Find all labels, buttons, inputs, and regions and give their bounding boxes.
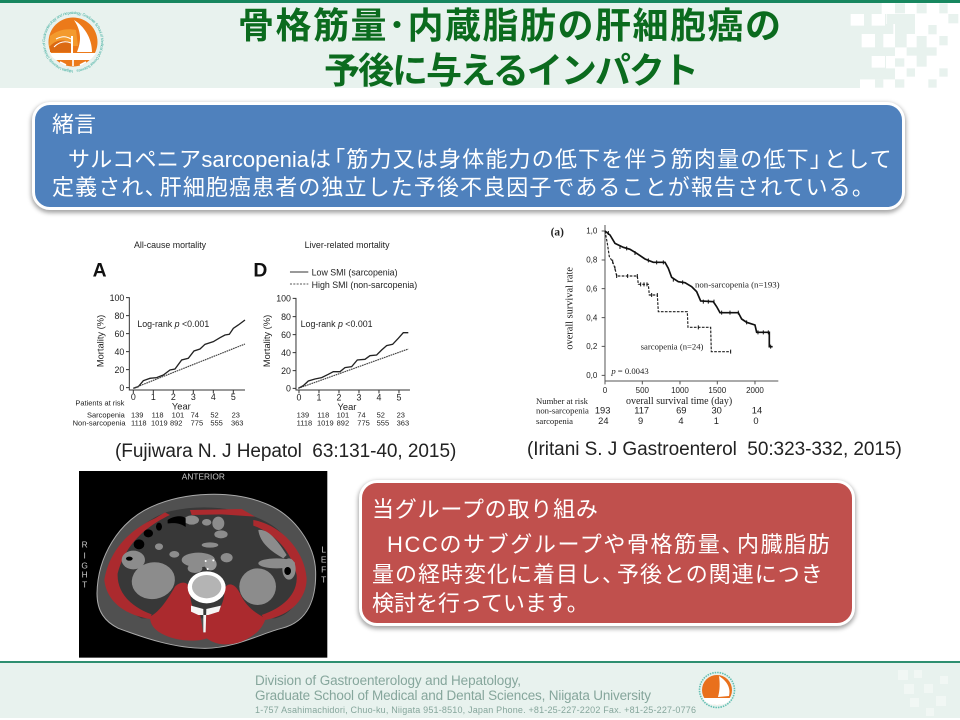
chart: mortality curves A and D: 0 xyxy=(131,392,136,402)
chart: mortality curves A and D: 5 xyxy=(397,393,402,403)
footer: institution text: Division of Gastroenterology and Hepatology, xyxy=(255,673,521,688)
chart: mortality curves A and D: 2 xyxy=(171,392,176,402)
image: abdominal CT with muscle highlighted: L xyxy=(321,544,326,554)
chart: mortality curves A and D: 3 xyxy=(357,393,362,403)
panel: our group's efforts: 量の経時変化に着目し、予後との関連につき xyxy=(372,562,824,587)
image: abdominal CT with muscle highlighted: R xyxy=(82,539,88,549)
chart: mortality curves A and D: 74 xyxy=(191,410,199,419)
chart: overall survival curve: 0,0 xyxy=(586,371,598,380)
chart: mortality curves A and D: 101 xyxy=(337,410,349,419)
chart: mortality curves A and D: 52 xyxy=(377,410,385,419)
chart: mortality curves A and D: 892 xyxy=(170,419,182,428)
chart: mortality curves A and D: 80 xyxy=(114,311,124,321)
panel: introduction: サルコペニアsarcopeniaは「筋力又は身体能力の低下を伴う筋肉量の低下」として xyxy=(68,147,893,172)
chart: mortality curves A and D: D xyxy=(253,260,267,281)
chart: mortality curves A and D: Non-sarcopenia xyxy=(73,419,126,428)
chart: mortality curves A and D: 101 xyxy=(172,410,184,419)
image: abdominal CT with muscle highlighted: H xyxy=(82,570,88,580)
chart: mortality curves A and D: 2 xyxy=(337,393,342,403)
title xyxy=(238,5,783,91)
chart: mortality curves A and D: 80 xyxy=(281,312,291,322)
chart: overall survival curve: p = 0.0043 xyxy=(610,366,649,376)
chart: mortality curves A and D: 0 xyxy=(119,383,124,393)
chart: mortality curves A and D: Log-rank p <0.001 xyxy=(301,319,373,329)
chart: overall survival curve: 9 xyxy=(638,416,643,426)
chart: mortality curves A and D: 40 xyxy=(114,347,124,357)
chart: overall survival curve: 1000 xyxy=(671,386,689,395)
chart: overall survival curve: 2000 xyxy=(746,386,764,395)
chart: overall survival curve: 69 xyxy=(676,406,687,416)
footer: institution text: Graduate School of Medical and Dental Sciences, Niigata University xyxy=(255,688,651,703)
citation: Fujiwara: (Fujiwara N. J Hepatol 63:131-40, 2015) xyxy=(115,441,456,462)
chart: overall survival curve: 30 xyxy=(711,406,722,416)
chart: overall survival curve: 4 xyxy=(678,416,684,426)
chart: overall survival curve: 0,2 xyxy=(586,342,598,351)
chart: mortality curves A and D: High SMI (non-sarcopenia) xyxy=(312,280,417,290)
panel: our group's efforts: HCCのサブグループや骨格筋量、内臓脂肪 xyxy=(387,532,831,557)
chart: mortality curves A and D: 555 xyxy=(377,419,389,428)
chart: overall survival curve: non-sarcopenia (n=193) xyxy=(695,279,780,289)
chart: mortality curves A and D: 892 xyxy=(337,419,349,428)
chart: overall survival curve: 0,6 xyxy=(586,284,598,293)
chart: mortality curves A and D: 363 xyxy=(231,419,243,428)
chart: mortality curves A and D: Patients at risk xyxy=(75,398,125,407)
chart: mortality curves A and D: Low SMI (sarcopenia) xyxy=(312,268,398,278)
chart: overall survival curve: sarcopenia xyxy=(536,416,573,426)
chart: mortality curves A and D: 100 xyxy=(276,294,291,304)
chart: mortality curves A and D: 4 xyxy=(377,393,382,403)
panel: our group's efforts: 当グループの取り組み xyxy=(372,497,599,522)
header band xyxy=(0,0,960,88)
chart: mortality curves A and D: 52 xyxy=(210,410,219,419)
image: abdominal CT with muscle highlighted: T xyxy=(321,574,326,584)
chart: mortality curves A and D: 118 xyxy=(152,410,164,419)
chart: overall survival curve: 0 xyxy=(753,416,759,426)
chart: mortality curves A and D: Sarcopenia xyxy=(87,410,126,419)
chart: mortality curves A and D: Liver-related mortality xyxy=(305,240,390,250)
panel: our group's efforts: 検討を行っています。 xyxy=(372,591,589,616)
chart: mortality curves A and D: 1118 xyxy=(297,419,312,428)
chart: mortality curves A and D: 100 xyxy=(110,293,124,303)
title: 予後に与えるインパクト xyxy=(324,50,697,91)
chart: overall survival curve: overall survival time (day) xyxy=(626,396,732,407)
chart: mortality curves A and D: 60 xyxy=(114,329,124,339)
chart: mortality curves A and D: 0 xyxy=(286,384,291,394)
image: abdominal CT with muscle highlighted: I xyxy=(84,550,86,560)
chart: overall survival curve: non-sarcopenia xyxy=(536,406,589,416)
image: abdominal CT with muscle highlighted: ANTERIOR xyxy=(182,471,225,481)
chart: overall survival curve: (a) xyxy=(551,227,564,239)
chart: mortality curves A and D: 775 xyxy=(191,419,203,428)
chart: overall survival curve: 0,4 xyxy=(586,313,598,322)
chart: mortality curves A and D: 74 xyxy=(357,410,366,419)
chart: mortality curves A and D: 23 xyxy=(397,410,405,419)
chart: mortality curves A and D: Year xyxy=(338,402,356,412)
chart: mortality curves A and D: 775 xyxy=(357,419,370,428)
chart: overall survival curve: 117 xyxy=(634,406,649,416)
chart: mortality curves A and D: A xyxy=(93,260,107,281)
chart: overall survival curve: 0 xyxy=(603,386,608,395)
chart: mortality curves A and D: 0 xyxy=(297,393,302,403)
chart: mortality curves A and D: 3 xyxy=(191,392,196,402)
chart: mortality curves A and D: Mortality (%) xyxy=(96,315,106,367)
panel: our group's efforts xyxy=(359,480,855,626)
chart: overall survival curve: 0,8 xyxy=(586,256,598,265)
chart: mortality curves A and D: 20 xyxy=(281,366,291,376)
logo: university emblem in header: Niigata University Division of Gastroenterology and Hepatology, Graduate School of Medical and Dental Sciences xyxy=(42,11,104,73)
chart: mortality curves A and D: 1019 xyxy=(151,419,168,428)
chart: overall survival curve: 14 xyxy=(752,406,762,416)
image: abdominal CT with muscle highlighted: E xyxy=(321,554,327,564)
panel: introduction: 定義され、肝細胞癌患者の独立した予後不良因子であることが報告されている。 xyxy=(52,175,875,200)
chart: overall survival curve: 1,0 xyxy=(586,227,598,236)
chart: overall survival curve: Number at risk xyxy=(536,396,589,406)
chart: overall survival curve: sarcopenia (n=24) xyxy=(641,342,704,352)
title: 骨格筋量･内蔵脂肪の肝細胞癌の xyxy=(238,5,783,46)
chart: mortality curves A and D: 1118 xyxy=(131,419,147,428)
chart: overall survival curve: 1 xyxy=(714,416,719,426)
chart: mortality curves A and D: Log-rank p <0.001 xyxy=(137,319,209,329)
chart: mortality curves A and D: 60 xyxy=(281,330,291,340)
chart: mortality curves A and D: 23 xyxy=(232,410,240,419)
chart: overall survival curve: 1500 xyxy=(708,386,727,395)
chart: overall survival curve: 193 xyxy=(595,406,610,416)
chart: mortality curves A and D: 139 xyxy=(297,410,309,419)
chart: overall survival curve: 500 xyxy=(636,386,650,395)
chart: mortality curves A and D: 1 xyxy=(151,392,156,402)
panel: introduction: 緒言 xyxy=(52,112,96,137)
image: abdominal CT with muscle highlighted: G xyxy=(81,560,88,570)
image: abdominal CT with muscle highlighted: T xyxy=(82,580,87,590)
citation: Iritani: (Iritani S. J Gastroenterol 50:323-332, 2015) xyxy=(527,439,902,460)
chart: overall survival curve: overall survival rate xyxy=(565,267,576,350)
chart: mortality curves A and D: 1 xyxy=(317,393,322,403)
chart: mortality curves A and D: 555 xyxy=(210,419,223,428)
chart: mortality curves A and D: 118 xyxy=(317,410,329,419)
chart: mortality curves A and D: 139 xyxy=(131,410,143,419)
chart: mortality curves A and D: 20 xyxy=(114,365,124,375)
panel: introduction xyxy=(32,102,905,210)
chart: mortality curves A and D: 40 xyxy=(281,348,291,358)
chart: mortality curves A and D: 4 xyxy=(211,392,216,402)
image: abdominal CT with muscle highlighted: F xyxy=(321,564,326,574)
chart: mortality curves A and D: Mortality (%) xyxy=(262,315,272,367)
chart: mortality curves A and D: 363 xyxy=(397,419,409,428)
chart: overall survival curve: 24 xyxy=(598,416,609,426)
chart: mortality curves A and D: Year xyxy=(172,401,191,411)
footer: institution text: 1-757 Asahimachidori, Chuo-ku, Niigata 951-8510, Japan Phone. +81-25-227-2202 Fax. +81-25-227-0776 xyxy=(255,705,696,715)
chart: mortality curves A and D: All-cause mortality xyxy=(134,240,207,250)
chart: mortality curves A and D: 5 xyxy=(231,392,236,402)
chart: mortality curves A and D: 1019 xyxy=(317,419,334,428)
